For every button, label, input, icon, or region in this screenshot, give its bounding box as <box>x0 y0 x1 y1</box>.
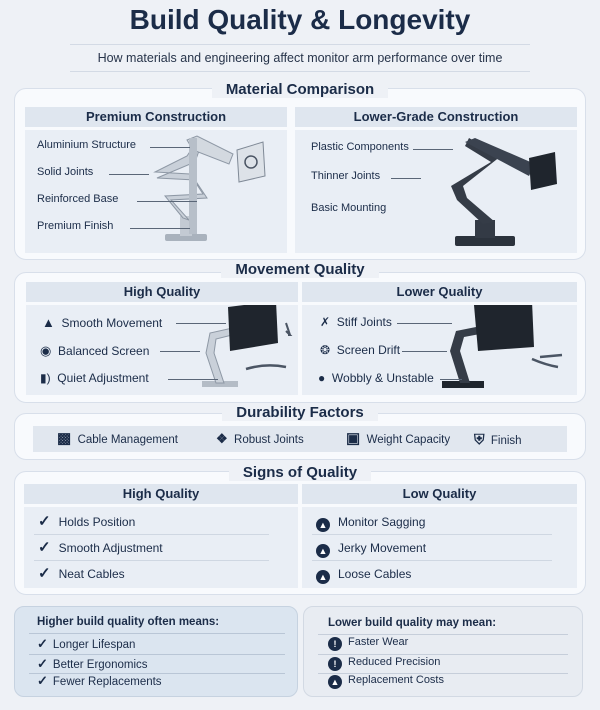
factor: weight capacity: ▣ Weight Capacity <box>346 430 450 447</box>
list: low quality signs: ▲ <box>319 546 327 556</box>
panel: signs of quality <box>14 471 586 595</box>
callout: higher build quality <box>14 606 298 697</box>
subheader: high quality: High Quality <box>124 284 200 299</box>
panel: material comparison <box>14 88 586 260</box>
list: low quality signs: ▲ <box>319 520 327 530</box>
subheader: high quality <box>26 282 298 302</box>
illustration: black arm with monitor <box>442 305 562 388</box>
subtitle: How materials and engineering affect monitor arm performance over time <box>98 51 502 65</box>
panel: durability factors <box>14 413 586 460</box>
factor: robust joints: ❖ Robust Joints <box>216 431 304 446</box>
illustration: silver arm with monitor <box>202 305 292 387</box>
label: aluminium structure: Aluminium Structure <box>37 139 136 151</box>
subheader: premium construction: Premium Construction <box>86 109 226 124</box>
subheader: high quality <box>24 484 298 504</box>
subheader: lower quality <box>302 282 577 302</box>
item: smooth movement: ▲ Smooth Movement <box>42 315 162 330</box>
panel: movement quality <box>14 272 586 403</box>
list: high quality signs: ✓ Neat Cables <box>38 565 125 582</box>
callout: lower build quality: ▲ <box>331 677 339 687</box>
subtitle <box>70 44 530 72</box>
list: high quality signs <box>24 507 298 588</box>
label: reinforced base: Reinforced Base <box>37 193 118 205</box>
subheader: lower quality: Lower Quality <box>397 284 482 299</box>
callout: higher build quality: ✓ Fewer Replacements <box>37 673 162 688</box>
callout: lower build quality <box>303 606 583 697</box>
body: lower quality movement <box>302 305 577 395</box>
callout: higher build quality: ✓ Better Ergonomics <box>37 656 148 671</box>
label: basic mounting: Basic Mounting <box>311 202 386 214</box>
callout: higher build quality: Higher build quality often means: <box>37 616 219 628</box>
heading: material comparison: Material Comparison <box>226 81 374 98</box>
body: premium <box>25 130 287 253</box>
callout: lower build quality: Lower build quality may mean: <box>328 617 496 629</box>
subheader: lower-grade construction: Lower-Grade Construction <box>354 109 518 124</box>
heading: movement quality: Movement Quality <box>235 261 365 278</box>
body: lower-grade <box>295 130 577 253</box>
heading: signs of quality: Signs of Quality <box>243 464 357 481</box>
list: high quality signs: ✓ Holds Position <box>38 513 135 530</box>
list: high quality signs: ✓ Smooth Adjustment <box>38 539 163 556</box>
title: Build Quality & Longevity <box>130 4 470 35</box>
list: low quality signs: ▲ <box>319 572 327 582</box>
callout: lower build quality: Faster Wear <box>348 636 408 648</box>
factor: finish: ⛨ Finish <box>474 431 522 447</box>
label: thinner joints: Thinner Joints <box>311 170 380 182</box>
list: low quality signs: Jerky Movement <box>338 541 426 555</box>
item: balanced screen: ◉ Balanced Screen <box>40 343 149 358</box>
label: solid joints: Solid Joints <box>37 166 93 178</box>
factor: cable management: ▩ Cable Management <box>57 430 178 447</box>
list: low quality signs: Loose Cables <box>338 567 411 581</box>
item: wobbly & unstable: ● Wobbly & Unstable <box>318 371 434 385</box>
subheader: premium construction <box>25 107 287 127</box>
list: low quality signs: Monitor Sagging <box>338 515 425 529</box>
factor bar <box>33 426 567 452</box>
subheader: low quality <box>302 484 577 504</box>
callout: higher build quality: ✓ Longer Lifespan <box>37 636 135 651</box>
subheader: low quality: Low Quality <box>403 486 476 501</box>
callout: lower build quality: Replacement Costs <box>348 674 444 686</box>
item: stiff joints: ✗ Stiff Joints <box>320 315 392 329</box>
subheader: high quality: High Quality <box>123 486 199 501</box>
illustration: silver monitor arm <box>153 136 266 241</box>
item: quiet adjustment: ▮) Quiet Adjustment <box>40 371 149 385</box>
illustration: black monitor arm <box>451 138 557 246</box>
body: high quality movement <box>26 305 298 395</box>
callout: lower build quality: Reduced Precision <box>348 656 440 668</box>
label: plastic components: Plastic Components <box>311 141 409 153</box>
callout: lower build quality: ! <box>334 639 336 649</box>
heading: durability factors: Durability Factors <box>236 404 364 421</box>
callout: lower build quality: ! <box>334 659 336 669</box>
list: low quality signs <box>302 507 577 588</box>
subheader: lower-grade construction <box>295 107 577 127</box>
item: screen drift: ❂ Screen Drift <box>320 343 400 357</box>
label: premium finish: Premium Finish <box>37 220 113 232</box>
